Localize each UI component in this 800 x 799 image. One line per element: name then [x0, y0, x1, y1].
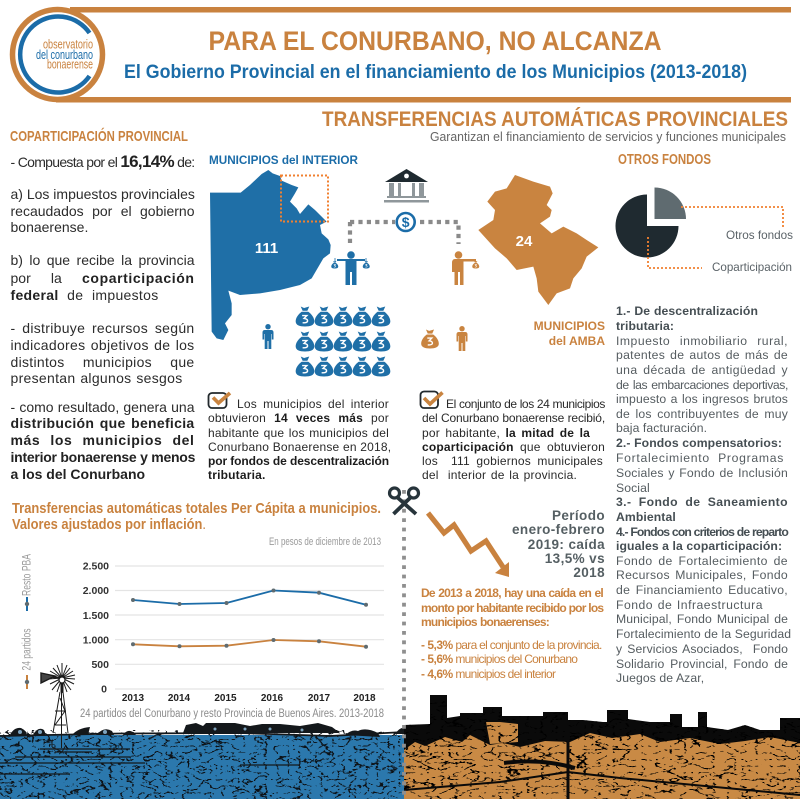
text: más los municipios del	[10, 432, 194, 448]
chart caption: 24 partidos del Conurbano y resto Provincia de Buenos Aires. 2013-2018	[80, 708, 384, 720]
section subheading: Garantizan el financiamiento de servicios y funciones municipales	[430, 130, 786, 144]
chart note: unit: En pesos de diciembre de 2013	[269, 536, 381, 548]
landscape: countryside	[0, 723, 404, 799]
text: b) lo que recibe la provincia	[10, 252, 194, 268]
map: municipios del AMBA: 24	[516, 233, 533, 250]
icon: falling arrow	[428, 513, 509, 577]
text: Social	[616, 481, 650, 495]
icon: person, interior	[262, 324, 274, 349]
text: Recursos Municipales, Fondo	[616, 568, 788, 582]
text: bonaerense.	[10, 219, 88, 235]
line chart: 500	[91, 659, 109, 671]
logo: observatorio del conurbano bonaerense: observatorio	[43, 38, 93, 52]
line chart: 2015	[214, 693, 237, 704]
text: monto por habitante recibido por los	[421, 601, 603, 615]
text: - distribuye recursos según	[10, 320, 194, 336]
chart legend: resto PBA: Resto PBA	[22, 554, 34, 596]
line chart: 1.500	[83, 610, 109, 622]
subtitle: El Gobierno Provincial en el financiamiento de los Municipios (2013-2018)	[124, 62, 747, 83]
text block: coparticipación provincial	[10, 152, 195, 482]
heading: chart title: Valores ajustados por inflación.	[12, 516, 206, 533]
text: Los municipios del interior	[237, 397, 389, 411]
heading: municipios del AMBA: MUNICIPIOS	[534, 319, 605, 333]
text: coparticipación que obtuvieron	[422, 440, 605, 454]
icon: person with one bag	[452, 251, 479, 285]
icon: dollar coin	[397, 213, 415, 231]
icon: person with two bags	[331, 251, 370, 285]
text: una década de antigüedad y	[616, 363, 788, 377]
text: interior bonaerense y menos	[10, 449, 195, 465]
logo: observatorio del conurbano bonaerense: del conurbano	[36, 48, 93, 62]
icon: check left	[208, 393, 230, 408]
line chart: 2.500	[83, 560, 109, 572]
text: distribución que beneficia	[10, 415, 194, 431]
icon: check right	[420, 392, 442, 408]
text: recaudados por el gobierno	[10, 203, 194, 219]
text: habitante que los municipios del	[208, 426, 389, 440]
text: Fortalecimiento Programas	[616, 451, 784, 465]
text: - 5,6% municipios del Conurbano	[421, 652, 577, 666]
text: presentan algunos sesgos	[10, 370, 182, 386]
text: 2018	[573, 565, 605, 580]
text: por habitante, la mitad de la	[422, 426, 590, 440]
text: - 5,3% para el conjunto de la provincia.	[421, 638, 602, 652]
text: impuesto a los ingresos brutos	[616, 392, 788, 406]
text: a) Los impuestos provinciales	[10, 186, 195, 202]
icon: dollar coin: $	[402, 214, 410, 230]
line chart: 2014	[168, 693, 191, 704]
text: por fondos de descentralización	[208, 454, 389, 468]
text: tributaria:	[616, 319, 674, 333]
text block: municipios del conurbano	[422, 397, 605, 482]
heading: chart title: Transferencias automáticas totales Per Cápita a municipios.	[12, 500, 381, 517]
text: Ambiental	[616, 510, 676, 524]
heading: municipios del AMBA	[534, 319, 605, 348]
text: y Servicios Asociados, Fondo	[616, 642, 788, 656]
text: Fortalecimiento de la Seguridad	[616, 627, 791, 641]
text: Sociales y Fondo de Inclusión	[616, 466, 788, 480]
text: De 2013 a 2018, hay una caída en el	[421, 586, 603, 600]
chart legend: 24 partidos	[22, 628, 34, 689]
text: de los contribuyentes de muy	[616, 407, 788, 421]
text: 1.- De descentralización	[616, 304, 758, 318]
line chart: 2018	[353, 693, 376, 704]
line chart: 2.000	[83, 585, 109, 597]
text: obtuvieron 14 veces más por	[208, 411, 389, 425]
map: municipios del interior	[210, 170, 331, 340]
text: tributaria.	[208, 468, 266, 482]
line chart: 2016	[261, 693, 284, 704]
callout: período enero-febrero 2019	[512, 508, 605, 580]
text: de las embarcaciones deportivas,	[616, 378, 788, 392]
text: de Financiamiento Educativo,	[616, 583, 788, 597]
heading: coparticipación provincial: COPARTICIPACIÓN PROVINCIAL	[10, 127, 188, 145]
separator: cut line	[402, 490, 406, 799]
text: Municipal, Fondo Municipal de	[616, 612, 788, 626]
line chart: 2017	[308, 693, 331, 704]
text block: caída por habitante	[421, 586, 604, 681]
text: federal de impuestos	[10, 287, 158, 303]
header frame	[56, 7, 791, 102]
text: los 111 gobiernos municipales	[422, 454, 603, 468]
text: por la coparticipación	[10, 270, 194, 286]
text: 2019: caída	[528, 537, 605, 552]
text: Juegos de Azar,	[616, 671, 704, 685]
text: indicadores objetivos de los	[10, 337, 194, 353]
icon: scissors	[390, 488, 418, 514]
text block: municipios del interior	[208, 397, 391, 482]
text: Impuesto inmobiliario rural,	[616, 334, 788, 348]
map: municipios del interior: 111	[255, 240, 278, 257]
heading: municipios del AMBA: del AMBA	[549, 334, 605, 348]
text: municipios bonaerenses:	[421, 615, 549, 629]
line chart	[83, 560, 384, 704]
heading: chart title	[12, 500, 381, 533]
pie chart	[616, 188, 783, 268]
text: distintos municipios que	[10, 354, 194, 370]
flow connector	[350, 222, 458, 244]
line chart: 0	[101, 684, 107, 696]
text: a los del Conurbano	[10, 466, 145, 482]
text: 13,5% vs	[545, 551, 605, 566]
text: Fondo de Fortalecimiento de	[616, 554, 788, 568]
text: 3.- Fondo de Saneamiento	[616, 495, 788, 509]
text: iguales a la coparticipación:	[616, 539, 782, 553]
text: - 4,6% municipios del interior	[421, 667, 555, 681]
landscape: city skyline	[404, 690, 800, 799]
text: Período	[552, 508, 605, 523]
text block: otros fondos detail	[616, 304, 791, 685]
text: Solidario Provincial, Fondo de	[616, 657, 788, 671]
chart legend: resto PBA	[22, 554, 34, 611]
icon: bank	[384, 169, 429, 202]
line chart: 1.000	[83, 634, 109, 646]
text: del Conurbano bonaerense recibió,	[422, 411, 605, 425]
icon grid: fifteen money bags	[296, 307, 390, 376]
text: - como resultado, genera una	[10, 399, 194, 415]
icon: windmill	[41, 663, 75, 752]
text: - Compuesta por el 16,14% de:	[10, 152, 194, 171]
text: 2.- Fondos compensatorios:	[616, 436, 782, 450]
text: 4.- Fondos con criterios de reparto	[616, 525, 788, 539]
text: El conjunto de los 24 municipios	[446, 397, 605, 411]
logo: observatorio del conurbano bonaerense: bonaerense	[47, 58, 93, 72]
pie label: otros fondos: Otros fondos	[726, 228, 793, 242]
text: baja facturación.	[616, 421, 707, 435]
heading: municipios del interior: MUNICIPIOS del INTERIOR	[209, 153, 358, 167]
text: patentes de autos de más de	[616, 348, 788, 362]
text: Fondo de Infraestructura	[616, 598, 763, 612]
text: Conurbano Bonaerense en 2018,	[208, 440, 391, 454]
icon: one money bag	[421, 330, 439, 348]
chart legend: 24 partidos: 24 partidos	[22, 628, 34, 670]
pie label: coparticipación: Coparticipación	[712, 260, 792, 274]
text: del interior de la provincia.	[422, 468, 577, 482]
heading: otros fondos: OTROS FONDOS	[618, 152, 711, 168]
icon: person, conurbano	[456, 326, 468, 351]
logo: observatorio del conurbano bonaerense	[12, 10, 102, 100]
text: enero-febrero	[512, 522, 605, 537]
map: municipios del AMBA	[478, 175, 598, 305]
title: PARA EL CONURBANO, NO ALCANZA	[208, 26, 662, 56]
line chart: 2013	[122, 693, 145, 704]
